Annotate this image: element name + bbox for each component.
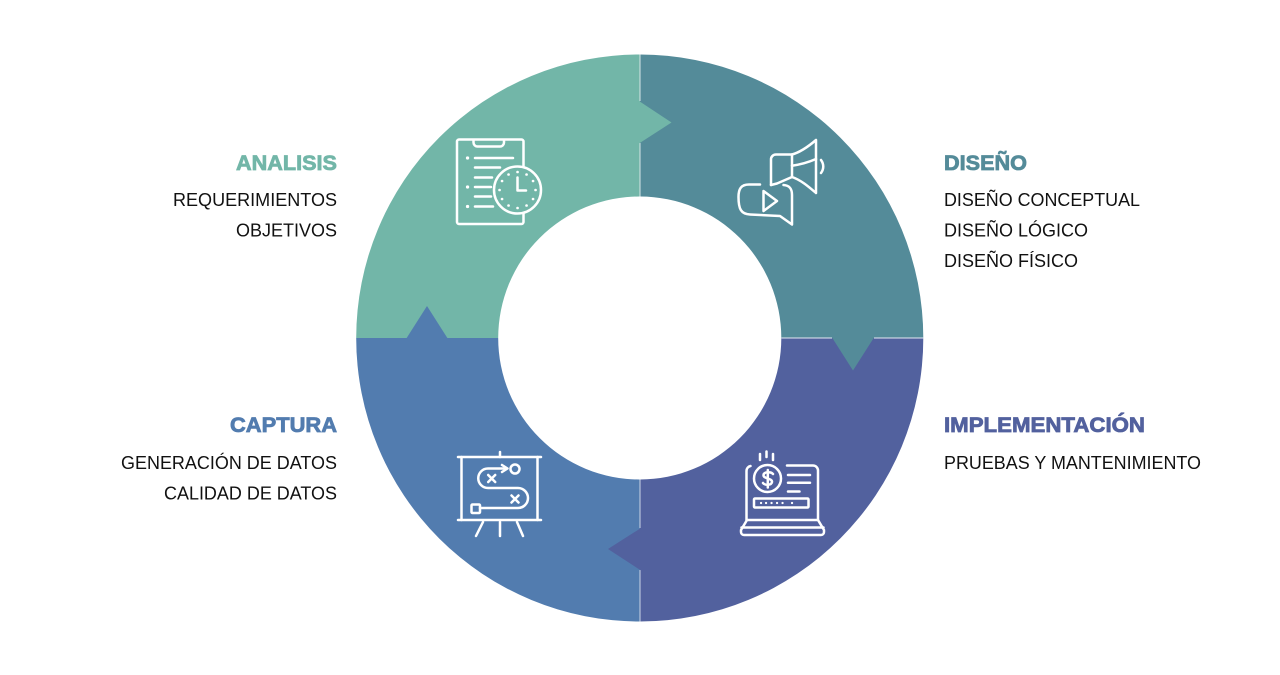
- segment: implementación: [640, 338, 923, 622]
- icon: laptop payment: [741, 452, 824, 535]
- item: pruebas y mantenimiento: PRUEBAS Y MANTENIMIENTO: [944, 453, 1201, 473]
- segment: captura: [356, 338, 640, 622]
- seam: top: [639, 54, 641, 196]
- item: diseño lógico: DISEÑO LÓGICO: [944, 220, 1088, 240]
- item: generación de datos: GENERACIÓN DE DATOS: [121, 452, 337, 473]
- heading: analisis: ANALISIS: [236, 151, 337, 175]
- arrow: captura to analisis: [406, 306, 448, 339]
- arrow: implementación to captura: [608, 528, 641, 570]
- item: diseño físico: DISEÑO FÍSICO: [944, 250, 1078, 271]
- item: objetivos: OBJETIVOS: [236, 220, 337, 240]
- heading: captura: CAPTURA: [230, 413, 337, 437]
- cycle diagram: [356, 54, 924, 622]
- icon: clipboard with clock: [457, 140, 541, 224]
- icon: strategy board: [458, 452, 541, 536]
- heading: implementación: IMPLEMENTACIÓN: [944, 412, 1145, 437]
- text block: diseño: [944, 150, 1140, 271]
- seam: right: [782, 337, 924, 339]
- item: requerimientos: REQUERIMIENTOS: [173, 190, 337, 210]
- segment: diseño: [640, 54, 923, 338]
- heading: diseño: DISEÑO: [944, 150, 1027, 175]
- text block: analisis: [173, 151, 337, 240]
- icon: megaphone and video bubble: [738, 140, 823, 224]
- arrow: analisis to diseño: [639, 101, 672, 144]
- arrow: diseño to implementación: [832, 338, 874, 370]
- text block: captura: [121, 413, 337, 504]
- text block: implementación: [944, 412, 1201, 473]
- item: diseño conceptual: DISEÑO CONCEPTUAL: [944, 189, 1140, 210]
- item: calidad de datos: CALIDAD DE DATOS: [164, 484, 337, 504]
- segment: analisis: [356, 54, 640, 338]
- seam: bottom: [639, 480, 641, 622]
